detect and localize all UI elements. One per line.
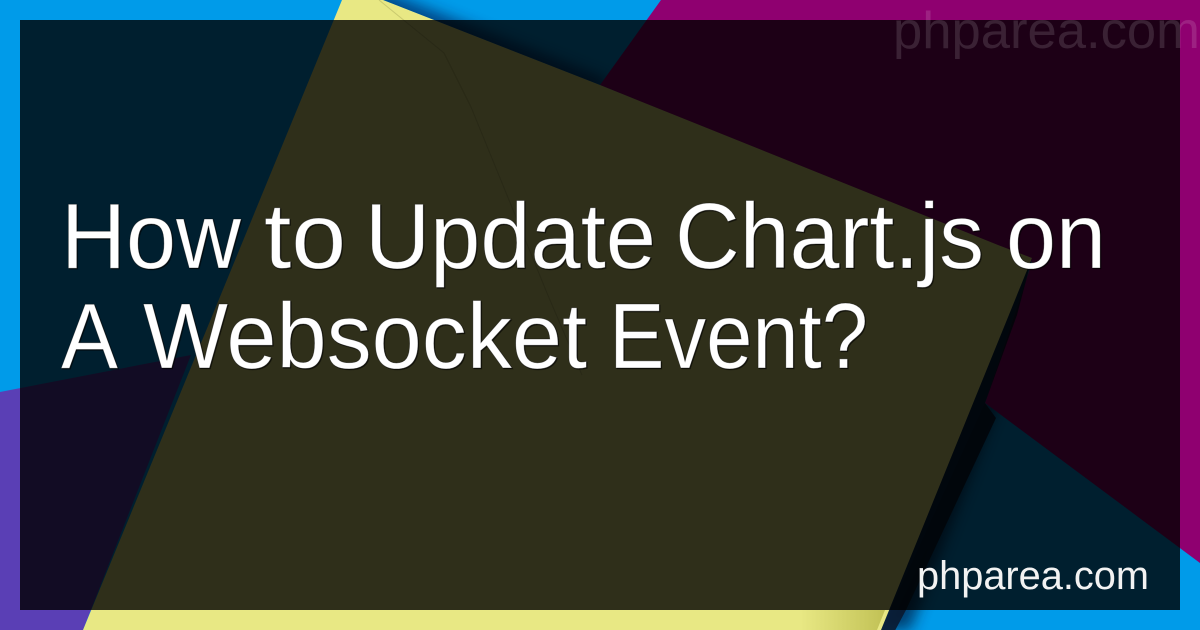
title [61,184,1106,388]
title line 1: to [264,184,346,288]
hard shadow band beside envelope edge [870,258,1032,630]
title line 1: Chart.js [675,184,984,288]
sheet: magenta upper right [600,0,1200,563]
title line 2: Websocket [143,284,587,388]
envelope fold line [379,0,582,375]
title line 1: How [61,184,242,288]
shadow on blue beside envelope flap [384,0,604,85]
title line 2: A [61,284,118,388]
title line 2 [61,284,868,388]
title line 2: Event? [609,284,868,388]
watermark: top right: phparea.com [893,2,1200,60]
title line 1: Update [365,184,656,288]
site name: bottom right: phparea.com [917,554,1149,598]
title line 1: on [1006,184,1106,288]
shadow on blue beside envelope edge [886,404,998,630]
sheet: purple lower left [0,355,191,630]
envelope edge darkening [800,610,885,630]
title line 1 [61,184,1106,288]
envelope: yellow [83,0,1032,630]
